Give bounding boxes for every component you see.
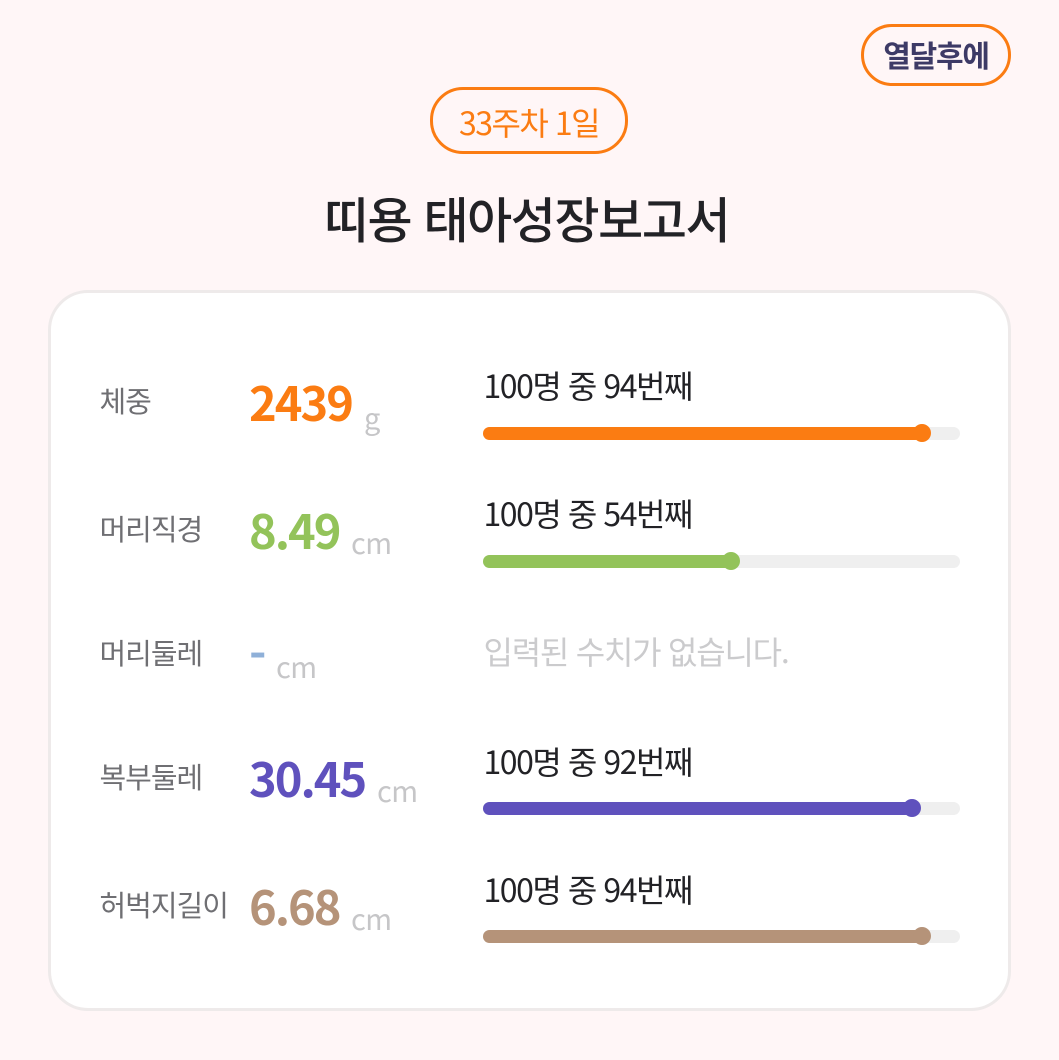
- rank text: 100명 중 94번째: [484, 866, 692, 912]
- row: head circumference: [100, 618, 788, 687]
- value: head circumference: -: [249, 618, 264, 687]
- button: 열달후에: 열달후에: [883, 32, 989, 76]
- rank text: 100명 중 54번째: [484, 490, 692, 536]
- week badge: [430, 87, 628, 154]
- label: abdominal circumference: 복부둘레: [100, 755, 202, 797]
- value: abdominal circumference: 30.45: [249, 742, 365, 811]
- rank text: 100명 중 94번째: [484, 362, 692, 408]
- unit: cm: cm: [351, 521, 392, 563]
- panel: measurements: [48, 290, 1011, 1011]
- label: weight: 체중: [100, 379, 151, 421]
- bar: femur percentile: [483, 930, 960, 942]
- week badge: 33주차 1일: [459, 99, 599, 145]
- button: 열달후에: [861, 24, 1011, 86]
- unit: cm: cm: [377, 769, 418, 811]
- bar: abdominal percentile: [483, 802, 960, 814]
- label: head diameter: 머리직경: [100, 507, 202, 549]
- label: head circumference: 머리둘레: [100, 631, 202, 673]
- unit: cm: cm: [351, 897, 392, 939]
- title: 띠용 태아성장보고서: [324, 182, 729, 253]
- row: femur length: [100, 866, 692, 939]
- row: weight: [100, 362, 692, 438]
- rank text: 100명 중 92번째: [484, 738, 692, 784]
- unit: cm: cm: [276, 645, 317, 687]
- value: femur length: 6.68: [249, 870, 340, 939]
- row: head diameter: [100, 490, 692, 563]
- bar: head diameter percentile: [483, 555, 960, 568]
- value: weight: 2439: [249, 366, 352, 435]
- label: femur length: 허벅지길이: [100, 883, 228, 925]
- unit: g: g: [364, 396, 380, 438]
- row: abdominal circumference: [100, 738, 692, 811]
- no data message: 입력된 수치가 없습니다.: [484, 628, 788, 674]
- value: head diameter: 8.49: [249, 494, 340, 563]
- bar: weight percentile: [483, 427, 960, 440]
